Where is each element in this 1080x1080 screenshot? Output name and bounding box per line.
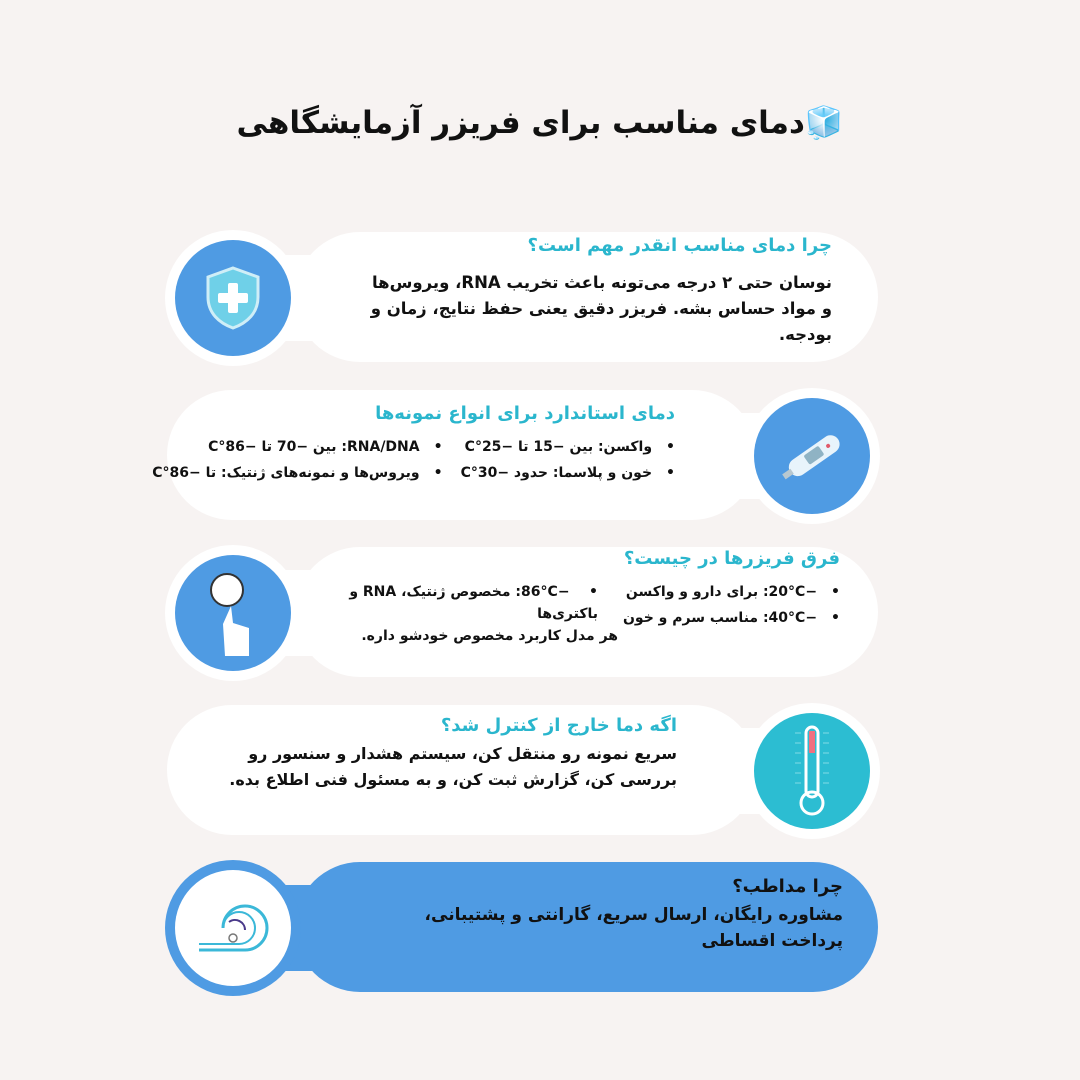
panel: freezer differences [165, 545, 878, 681]
bullets: −20°C: برای دارو و واکسن [626, 584, 817, 600]
panel: freezer differences: هر مدل کاربرد مخصوص خودشو داره. [361, 628, 618, 644]
panel: out of control [167, 703, 880, 839]
icon: MRI scanner [165, 860, 301, 996]
title: 🧊دمای مناسب برای فریزر آزمایشگاهی [236, 105, 844, 141]
icon: shield [165, 230, 301, 366]
panel: why Modateb [165, 860, 878, 996]
heading: فرق فریزرها در چیست؟ [624, 548, 840, 569]
icon: magnifier hand [165, 545, 301, 681]
icon: thermometer teal [744, 703, 880, 839]
icon: thermometer [744, 388, 880, 524]
bullet lists: RNA/DNA: بین −70 تا −86°C [208, 439, 420, 455]
heading: دمای استاندارد برای انواع نمونه‌ها [375, 403, 675, 424]
bullet lists: ویروس‌ها و نمونه‌های ژنتیک: تا −86°C [152, 465, 420, 481]
bullets: −40°C: مناسب سرم و خون [623, 610, 817, 626]
text block: مشاوره رایگان، ارسال سریع، گارانتی و پشتیبانی، پرداخت اقساطی [425, 905, 843, 951]
heading: چرا مداطب؟ [732, 876, 843, 897]
bullet lists: واکسن: بین −15 تا −25°C [465, 439, 652, 455]
text block: نوسان حتی ۲ درجه می‌تونه باعث تخریب RNA، ویروس‌ها و مواد حساس بشه. فریزر دقیق یعنی حفظ نتایج، زمان و بودجه. [371, 273, 832, 344]
text block: سریع نمونه رو منتقل کن، سیستم هشدار و سنسور رو بررسی کن، گزارش ثبت کن، و به مسئول فنی اطلاع بده. [229, 744, 677, 789]
panel: freezer differences: • −86°C: مخصوص ژنتیک، RNA و باکتری‌ها [349, 584, 598, 622]
panel: standard temperatures [152, 388, 880, 524]
bullet lists [152, 439, 673, 481]
panel: why temperature matters [165, 230, 878, 366]
heading: چرا دمای مناسب انقدر مهم است؟ [528, 235, 832, 256]
bullet lists: خون و پلاسما: حدود −30°C [461, 465, 652, 481]
heading: اگه دما خارج از کنترل شد؟ [441, 715, 677, 736]
bullets [623, 584, 838, 626]
